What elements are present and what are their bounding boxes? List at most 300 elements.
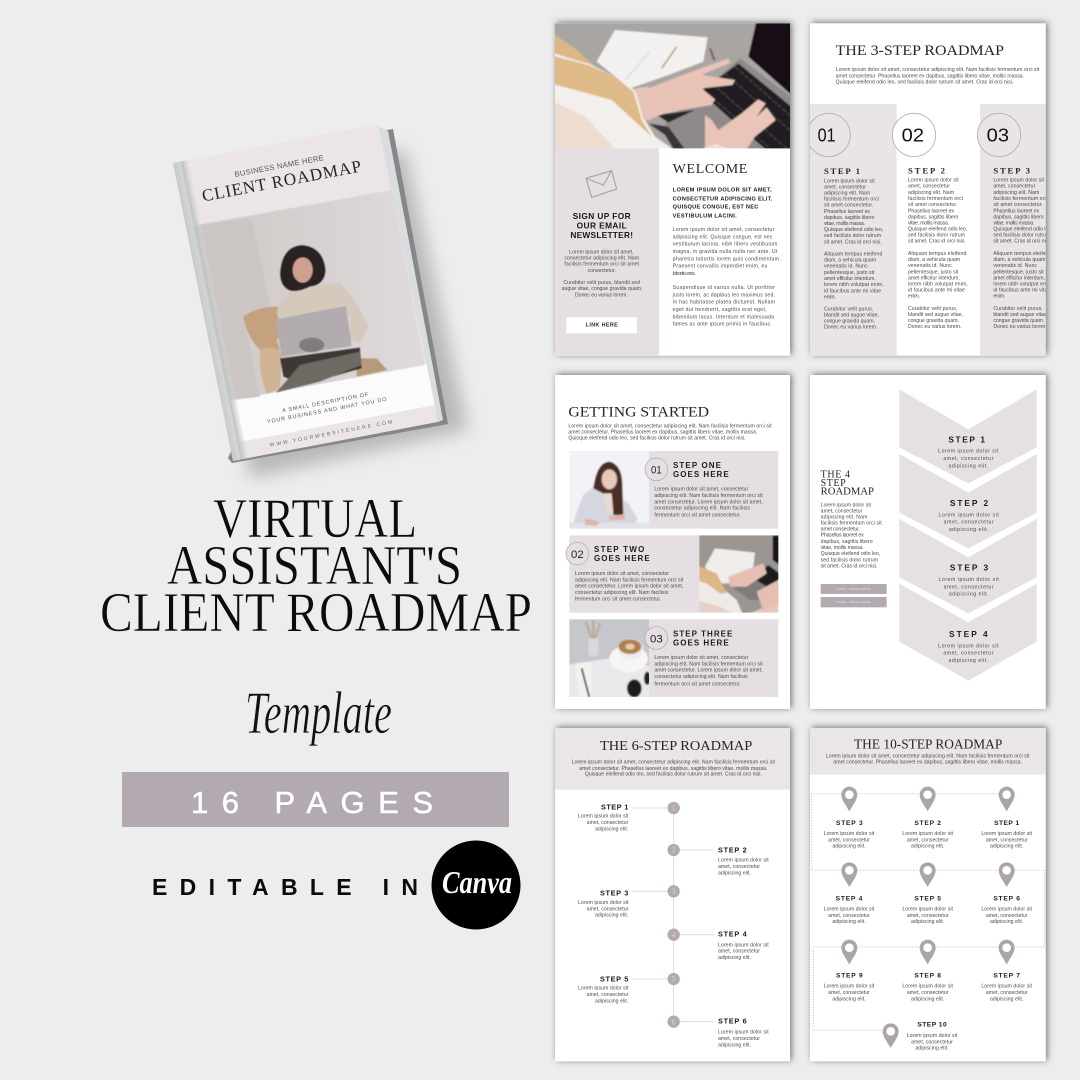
step 3 column xyxy=(977,113,1053,330)
step 2 column: dapibus, sagittis libero xyxy=(908,214,958,220)
step 1 column: Aliquam tempus eleifend xyxy=(824,252,882,258)
step 2 column: 02 xyxy=(902,125,924,146)
step 8 xyxy=(902,973,954,1002)
intro text: sed facilisis dolor rutrum xyxy=(821,557,878,563)
step 3 column: Quisque eleifend odio leo, xyxy=(993,226,1053,232)
step 3 xyxy=(578,889,629,919)
step 3: amet, consectetur xyxy=(828,837,870,843)
step 3 column: Curabitur velit purus, xyxy=(993,306,1043,312)
step heading: GOES HERE xyxy=(594,554,650,563)
step 6 xyxy=(718,1017,769,1048)
step 3 column: adipiscing elit. Nam xyxy=(993,190,1039,196)
step heading xyxy=(673,461,729,479)
step 10 xyxy=(907,1022,958,1052)
step text xyxy=(575,571,684,603)
step 4: amet, consectetur xyxy=(828,913,870,919)
step 1 column: Phasellus laoreet ex xyxy=(824,209,870,215)
step 1 column: facilisis fermentum orci xyxy=(824,197,879,203)
welcome body: magna, in gravida nulla nulla nec ante. Ut xyxy=(673,249,778,255)
step 3 column: sit amet consectetur. xyxy=(993,202,1043,208)
step 3 column: Donec eu varius lorem. xyxy=(993,324,1047,330)
panel: getting started page xyxy=(555,375,790,709)
step 9: Lorem ipsum dolor sit xyxy=(824,984,875,990)
welcome body: Suspendisse id varius nulla. Ut porttitor xyxy=(673,285,775,291)
step 2: amet, consectetur xyxy=(718,864,760,870)
welcome lead text: LOREM IPSUM DOLOR SIT AMET, xyxy=(673,188,772,194)
step 4 xyxy=(824,896,875,925)
main title xyxy=(100,488,532,644)
step 4: STEP 4 xyxy=(718,929,748,938)
welcome body: adipiscing elit. Quisque congue, est nec xyxy=(673,234,773,240)
signup text: consectetur adipiscing elit. Nam xyxy=(564,256,639,262)
step 9: STEP 9 xyxy=(836,973,863,980)
step text: amet consectetur. Lorem ipsum dolor sit amet, xyxy=(654,668,763,674)
step 1 column: enim. xyxy=(824,294,836,300)
panel: welcome page xyxy=(550,18,797,356)
script subtitle: Template xyxy=(245,680,392,746)
heading: ROADMAP xyxy=(821,486,874,497)
step 2: adipiscing elit. xyxy=(718,870,751,876)
intro text: amet consectetur. Phasellus laoreet ex dapibus, sagittis libero vitae, mollis massa. xyxy=(568,429,757,435)
step 6: Lorem ipsum dolor sit xyxy=(981,907,1033,913)
step 1: Lorem ipsum dolor sit xyxy=(578,814,629,820)
step 3 column: sit amet. Cras id orci nisi. xyxy=(993,239,1051,245)
step 3 column: id faucibus ante mi vitae xyxy=(993,288,1050,294)
step 3 column: dapibus, sagittis libero xyxy=(993,214,1044,220)
step 2 column: pellentesque, justo sit xyxy=(908,269,959,275)
step 4: amet, consectetur xyxy=(718,949,760,955)
signup text: consectetur. xyxy=(587,268,616,274)
step 2 column: lorem nibh volutpat enim, xyxy=(908,281,968,287)
step heading: GOES HERE xyxy=(673,638,729,647)
cover description: A SMALL DESCRIPTION OF xyxy=(282,392,369,414)
chevron: step 2: adipiscing elit. xyxy=(949,527,988,533)
step 5: STEP 5 xyxy=(914,896,941,903)
panel: 4-step roadmap page xyxy=(810,375,1046,709)
step 2 column: blandit sed augue vitae, xyxy=(908,312,963,318)
pages banner: 16 PAGES xyxy=(191,785,433,820)
step 1 column: adipiscing elit. Nam xyxy=(824,191,870,197)
header band: THE 10-STEP ROADMAP xyxy=(854,737,1003,752)
step 7: amet, consectetur xyxy=(986,990,1028,996)
step heading: GOES HERE xyxy=(673,470,729,479)
header band xyxy=(555,728,790,790)
cover website: WWW.YOURWEBSITEHERE.COM xyxy=(269,419,393,449)
step 1 column xyxy=(807,113,884,331)
step 1 column: 01 xyxy=(818,125,836,146)
step 1 column: amet efficitur interdum, xyxy=(824,276,876,282)
intro text: facilisis fermentum orci sit xyxy=(821,521,882,527)
intro text: amet, consectetur xyxy=(821,508,863,514)
step 1 column: sit amet. Cras id orci nisi. xyxy=(824,239,882,245)
link button: LINK HERE xyxy=(586,322,618,328)
heading: GETTING STARTED xyxy=(568,405,709,421)
chevron: step 4: adipiscing elit. xyxy=(948,658,988,664)
step 2 column: enim. xyxy=(908,294,920,300)
step 2 column: amet, consectetur xyxy=(908,184,950,190)
step text: adipiscing elit. Nam facilisis fermentum orci sit xyxy=(654,661,763,667)
resource button: TOOL / RESOURCE xyxy=(837,600,870,604)
step 2 column: STEP 2 xyxy=(908,165,945,175)
heading xyxy=(821,470,874,497)
step 5: STEP 5 xyxy=(600,974,628,983)
intro text: adipiscing elit. Nam xyxy=(821,514,867,520)
chevron: step 1: amet, consectetur xyxy=(943,456,994,462)
step 2 column: congue gravida quam. xyxy=(908,318,959,324)
step 3 column: 03 xyxy=(987,125,1009,146)
step 8: amet, consectetur xyxy=(907,990,949,996)
signup text: Donec eu varius lorem. xyxy=(575,292,628,298)
welcome lead text: QUISQUE CONGUE, EST NEC xyxy=(673,205,758,211)
step 3 column: STEP 3 xyxy=(993,165,1031,175)
intro text: Quisque eleifend odio leo, xyxy=(821,551,880,557)
chevron: step 2: Lorem ipsum dolor sit xyxy=(938,512,999,518)
step 3: STEP 3 xyxy=(600,889,628,898)
chevron: step 1: Lorem ipsum dolor sit xyxy=(938,449,999,455)
step 1 column: congue gravida quam. xyxy=(824,319,875,325)
welcome lead text xyxy=(673,188,773,219)
step 2 column xyxy=(892,113,968,330)
heading: STEP xyxy=(821,478,846,489)
step three row xyxy=(566,616,778,700)
intro text: Lorem ipsum dolor sit amet, consectetur adipiscing elit. Nam facilisis fermentum orci sit xyxy=(568,423,772,429)
step 1: STEP 1 xyxy=(994,820,1019,827)
intro text: Lorem ipsum dolor sit xyxy=(821,502,872,508)
signup text xyxy=(562,249,642,298)
step 3: Lorem ipsum dolor sit xyxy=(578,900,629,906)
dotted route xyxy=(812,794,1044,1030)
timeline: 2 xyxy=(672,846,676,855)
step 2 column: sit amet consectetur. xyxy=(908,202,957,208)
intro text: Quisque eleifend odio leo, sed facilisis dolor rutrum sit amet. Cras id orci nisi. xyxy=(568,435,746,441)
step 1 column: blandit sed augue vitae, xyxy=(824,313,879,319)
intro text xyxy=(568,423,772,441)
step 2: Lorem ipsum dolor sit xyxy=(902,831,954,837)
step 4: STEP 4 xyxy=(836,896,863,903)
welcome body: justo lorem, ac dapibus leo maximus sed. xyxy=(672,292,775,298)
chevron: step 3: adipiscing elit. xyxy=(949,592,988,598)
signup sidebar xyxy=(555,148,659,356)
chevron: step 3: amet, consectetur xyxy=(944,584,994,590)
intro text xyxy=(821,502,882,569)
timeline: 6 xyxy=(672,1017,676,1026)
welcome body: eget dui hendrerit, sagittis erat eget, xyxy=(673,307,767,313)
signup text: facilisis fermentum orci sit amet xyxy=(564,262,640,268)
welcome body: bibendum lacus. Interdum et malesuada xyxy=(673,314,774,320)
intro text: Lorem ipsum dolor sit amet, consectetur adipiscing elit. Nam facilisis fermentum orci sit xyxy=(836,67,1040,73)
step 1: adipiscing elit. xyxy=(990,844,1023,850)
step 2 column: Curabitur velit purus, xyxy=(908,306,957,312)
step text: amet consectetur. Lorem ipsum dolor sit amet, xyxy=(654,499,763,505)
intro text: Quisque eleifend odio leo, sed facilisis dolor rutrum sit amet. Cras id orci nisi. xyxy=(836,79,1013,85)
step two row xyxy=(566,532,782,616)
step 3 column: pellentesque, justo sit xyxy=(993,269,1044,275)
step 1: amet, consectetur xyxy=(986,837,1028,843)
step 2: amet, consectetur xyxy=(907,837,949,843)
step text: adipiscing elit. Nam facilisis fermentum orci sit xyxy=(575,577,684,583)
resource button xyxy=(821,584,887,594)
number badge xyxy=(566,542,589,565)
step text: Lorem ipsum dolor sit amet, consectetur xyxy=(654,487,749,493)
step 10: adipiscing elit. xyxy=(915,1046,949,1052)
signup text: Curabitur velit purus, blandit sed xyxy=(563,280,640,286)
canva badge xyxy=(432,840,520,930)
pages banner xyxy=(122,772,509,827)
welcome body: lobortis eros. xyxy=(673,271,696,277)
header band: amet consectetur. Phasellus laoreet ex dapibus, sagittis libero vitae, mollis massa. xyxy=(579,766,767,772)
step 1 column: lorem nibh volutpat enim, xyxy=(824,282,884,288)
step text: Lorem ipsum dolor sit amet, consectetur xyxy=(654,655,749,661)
step 7: Lorem ipsum dolor sit xyxy=(981,984,1033,990)
step 3 column: amet efficitur interdum, xyxy=(993,275,1045,281)
welcome body: vestibulum lacinia, nibh libero vestibulum xyxy=(673,242,777,248)
step 1 column: Donec eu varius lorem. xyxy=(824,325,877,331)
cover description: YOUR BUSINESS AND WHAT YOU DO xyxy=(267,397,387,425)
step 7 xyxy=(981,973,1033,1002)
timeline: 5 xyxy=(672,975,676,984)
step 3 column: venenatis id. Nunc xyxy=(993,263,1037,269)
welcome lead text: CONSECTETUR ADIPISCING ELIT. xyxy=(673,196,773,202)
step text: consectetur adipiscing elit. Nam facilisis xyxy=(654,674,748,680)
step text: fermentum orci sit amet consectetur. xyxy=(654,512,741,518)
step 3 xyxy=(824,820,875,850)
step 10: Lorem ipsum dolor sit xyxy=(907,1033,958,1039)
step 1 column: sed facilisis dolor rutrum xyxy=(824,233,881,239)
step 1 xyxy=(578,802,629,832)
step heading xyxy=(594,545,650,563)
chevron: step 4 xyxy=(899,584,1037,681)
welcome body: Praesent convallis imperdiet enim, eu xyxy=(673,264,767,270)
number badge: 01 xyxy=(651,465,662,477)
step 2 xyxy=(718,845,769,876)
step text: fermentum orci sit amet consectetur. xyxy=(575,597,661,603)
intro text: amet consectetur. Phasellus laoreet ex dapibus, sagittis libero vitae, mollis massa. xyxy=(836,74,1024,80)
step 3 column: sed facilisis dolor rutrum xyxy=(993,232,1050,238)
welcome body xyxy=(672,227,781,328)
step 1 column: Curabitur velit purus, xyxy=(824,307,873,313)
intro text: sit amet. Cras id orci nisi. xyxy=(821,563,877,569)
step heading: STEP TWO xyxy=(594,545,644,554)
step 1 column: pellentesque, justo sit xyxy=(824,270,875,276)
step text xyxy=(654,655,763,687)
main title: CLIENT ROADMAP xyxy=(100,582,532,644)
chevron: step 3: STEP 3 xyxy=(950,563,989,573)
chevron: step 2: STEP 2 xyxy=(950,498,989,508)
step 6: STEP 6 xyxy=(993,896,1020,903)
header band: amet consectetur. Phasellus laoreet ex dapibus, sagittis libero vitae, mollis massa. xyxy=(833,760,1022,766)
step 1: amet, consectetur xyxy=(587,820,629,826)
step 6: Lorem ipsum dolor sit xyxy=(718,1030,769,1036)
step 2 column: Phasellus laoreet ex xyxy=(908,208,954,214)
step 2 column: Aliquam tempus eleifend xyxy=(908,251,966,257)
main title: VIRTUAL xyxy=(213,488,417,550)
step 2 column: amet efficitur interdum, xyxy=(908,275,960,281)
step text: amet consectetur. Lorem ipsum dolor sit amet, xyxy=(575,584,683,590)
signup heading: SIGN UP FOR xyxy=(573,211,631,221)
step 6: adipiscing elit. xyxy=(990,919,1023,925)
step heading xyxy=(673,629,733,647)
step 10: STEP 10 xyxy=(917,1022,947,1029)
intro text: dapibus, sagittis libero xyxy=(821,539,873,545)
chevron: step 4: STEP 4 xyxy=(949,629,988,639)
step 8: Lorem ipsum dolor sit xyxy=(902,984,954,990)
step 2 column: id faucibus ante mi vitae xyxy=(908,288,965,294)
step 2 column: venenatis id. Nunc xyxy=(908,263,952,269)
chevron: step 1: adipiscing elit. xyxy=(948,463,988,469)
intro text: amet consectetur. xyxy=(821,527,860,533)
step 8: adipiscing elit. xyxy=(911,996,944,1002)
step 9: amet, consectetur xyxy=(828,990,870,996)
step text: fermentum orci sit amet consectetur. xyxy=(654,681,741,687)
number badge xyxy=(645,458,668,481)
step 1: adipiscing elit. xyxy=(595,826,628,832)
step 3 column: enim. xyxy=(993,294,1005,300)
step 3: amet, consectetur xyxy=(587,906,629,912)
chevron: step 2: amet, consectetur xyxy=(944,520,994,526)
step 3 column: lorem nibh volutpat enim, xyxy=(993,281,1053,287)
step 1 column: venenatis id. Nunc xyxy=(824,264,868,270)
number badge xyxy=(645,627,668,649)
header band: Lorem ipsum dolor sit amet, consectetur adipiscing elit. Nam facilisis fermentum orci sit xyxy=(572,759,776,765)
chevron: step 1 xyxy=(899,389,1037,483)
number badge: 02 xyxy=(571,549,584,561)
signup heading: NEWSLETTER! xyxy=(570,230,633,240)
step 3 column: Aliquam tempus eleifend xyxy=(993,251,1052,257)
heading: THE 3-STEP ROADMAP xyxy=(836,43,1004,59)
step 4 xyxy=(718,929,769,961)
canva badge: Canva xyxy=(442,864,512,900)
step 1 column: id faucibus ante mi vitae xyxy=(824,288,881,294)
chevron: step 3: Lorem ipsum dolor sit xyxy=(938,577,999,583)
step heading: STEP ONE xyxy=(673,461,722,470)
step 5: adipiscing elit. xyxy=(911,919,944,925)
cover photo xyxy=(188,190,425,400)
icon: envelope xyxy=(586,171,617,197)
chevron: step 3 xyxy=(899,519,1037,613)
welcome body: In hac habitasse platea dictumst. Nullam xyxy=(673,300,775,306)
step 9 xyxy=(824,973,875,1002)
step 10: amet, consectetur xyxy=(911,1039,953,1045)
timeline xyxy=(632,802,714,1028)
step 2 column: adipiscing elit. Nam xyxy=(908,190,954,196)
step 3 column: congue gravida quam. xyxy=(993,318,1044,324)
step 2: Lorem ipsum dolor sit xyxy=(718,858,769,864)
welcome body: fames ac ante ipsum primis in faucibus. xyxy=(673,322,772,328)
step 4: Lorem ipsum dolor sit xyxy=(718,942,769,948)
signup heading: OUR EMAIL xyxy=(577,221,627,231)
header band: Quisque eleifend odio leo, sed facilisis dolor rutrum sit amet. Cras id orci nisi. xyxy=(585,772,762,778)
photo: hands on laptop xyxy=(699,535,778,613)
step 8: STEP 8 xyxy=(914,973,941,980)
timeline: 1 xyxy=(672,804,676,813)
step 3: adipiscing elit. xyxy=(595,913,628,919)
main title: ASSISTANT'S xyxy=(167,535,462,597)
panel: 3-step roadmap page xyxy=(807,23,1053,356)
welcome body: Lorem ipsum dolor sit amet, consectetur xyxy=(673,227,775,233)
welcome lead text: VESTIBULUM LACINI. xyxy=(673,213,737,219)
photo: coffee on desk xyxy=(569,619,649,697)
step 1 column: vitae, mollis massa. xyxy=(824,221,865,227)
book mockup xyxy=(173,124,468,478)
step 6 xyxy=(981,896,1033,925)
step 1 column: diam, a vehicula quam xyxy=(824,258,876,264)
step 2 column: facilisis fermentum orci xyxy=(908,196,963,202)
step 2: STEP 2 xyxy=(914,820,941,827)
step 2 column: sit amet. Cras id orci nisi. xyxy=(908,239,966,245)
step 2: STEP 2 xyxy=(718,845,747,854)
step 6: STEP 6 xyxy=(718,1017,747,1026)
timeline: 4 xyxy=(672,930,676,939)
step 7: STEP 7 xyxy=(993,973,1020,980)
step 2: adipiscing elit. xyxy=(911,844,944,850)
photo: hands typing on laptop xyxy=(555,23,790,148)
step 5 xyxy=(902,896,954,925)
resource button xyxy=(821,597,887,607)
step 1 column: dapibus, sagittis libero xyxy=(824,215,874,221)
signup text: Lorem ipsum dolor sit amet, xyxy=(569,249,633,255)
step 1: Lorem ipsum dolor sit xyxy=(981,831,1033,837)
step text xyxy=(654,487,763,518)
step 6: amet, consectetur xyxy=(986,913,1028,919)
step 5 xyxy=(578,974,629,1004)
step 3 column: diam, a vehicula quam xyxy=(993,257,1045,263)
step 1 column: Lorem ipsum dolor sit xyxy=(824,178,875,184)
step 2 column: diam, a vehicula quam xyxy=(908,257,960,263)
timeline: 3 xyxy=(672,887,676,896)
editable label: EDITABLE IN xyxy=(152,874,418,900)
welcome body: pharetra lobortis lorem quis condimentum. xyxy=(673,256,781,262)
step 2 column: Lorem ipsum dolor sit xyxy=(908,178,959,184)
step 1 column: STEP 1 xyxy=(824,166,860,176)
step 5: Lorem ipsum dolor sit xyxy=(578,986,629,992)
step 5: amet, consectetur xyxy=(587,992,629,998)
chevron: step 1: STEP 1 xyxy=(948,434,985,444)
step 6: adipiscing elit. xyxy=(718,1042,751,1048)
step 1 xyxy=(981,820,1033,850)
chevron: step 4: amet, consectetur xyxy=(943,651,994,657)
intro text: vitae, mollis massa. xyxy=(821,545,864,551)
heading: THE 4 xyxy=(821,470,850,481)
step 3 column: facilisis fermentum orci xyxy=(993,196,1048,202)
step 2 column: vitae, mollis massa. xyxy=(908,220,949,226)
step 6: amet, consectetur xyxy=(718,1036,760,1042)
step text: adipiscing elit. Nam facilisis fermentum orci sit xyxy=(654,493,763,499)
step 3: STEP 3 xyxy=(836,820,863,827)
step 5: amet, consectetur xyxy=(907,913,949,919)
step 4: adipiscing elit. xyxy=(718,955,751,961)
step 3: adipiscing elit. xyxy=(832,844,866,850)
resource button: TOOL / RESOURCE xyxy=(837,587,870,591)
step 4: adipiscing elit. xyxy=(832,919,866,925)
step 1 column: Quisque eleifend odio leo, xyxy=(824,227,883,233)
intro text: Phasellus laoreet ex xyxy=(821,533,864,539)
step text: consectetur adipiscing elit. Nam facilisis xyxy=(654,506,750,512)
step 1 column: sit amet consectetur. xyxy=(824,203,873,209)
step 1: STEP 1 xyxy=(601,802,628,811)
step 2 xyxy=(902,820,954,850)
chevron: step 2 xyxy=(899,454,1037,548)
step 5: adipiscing elit. xyxy=(595,998,628,1004)
panel: 6-step roadmap page xyxy=(555,728,790,1061)
intro text xyxy=(836,67,1040,85)
number badge: 03 xyxy=(650,633,663,645)
signup text: augue vitae, congue gravida quam. xyxy=(562,286,642,292)
cover title: CLIENT ROADMAP xyxy=(200,157,363,206)
step text: Lorem ipsum dolor sit amet, consectetur xyxy=(575,571,669,577)
link button xyxy=(566,317,637,333)
panel: 10-step roadmap page xyxy=(810,728,1046,1061)
step 3 column: Lorem ipsum dolor sit xyxy=(993,178,1045,184)
